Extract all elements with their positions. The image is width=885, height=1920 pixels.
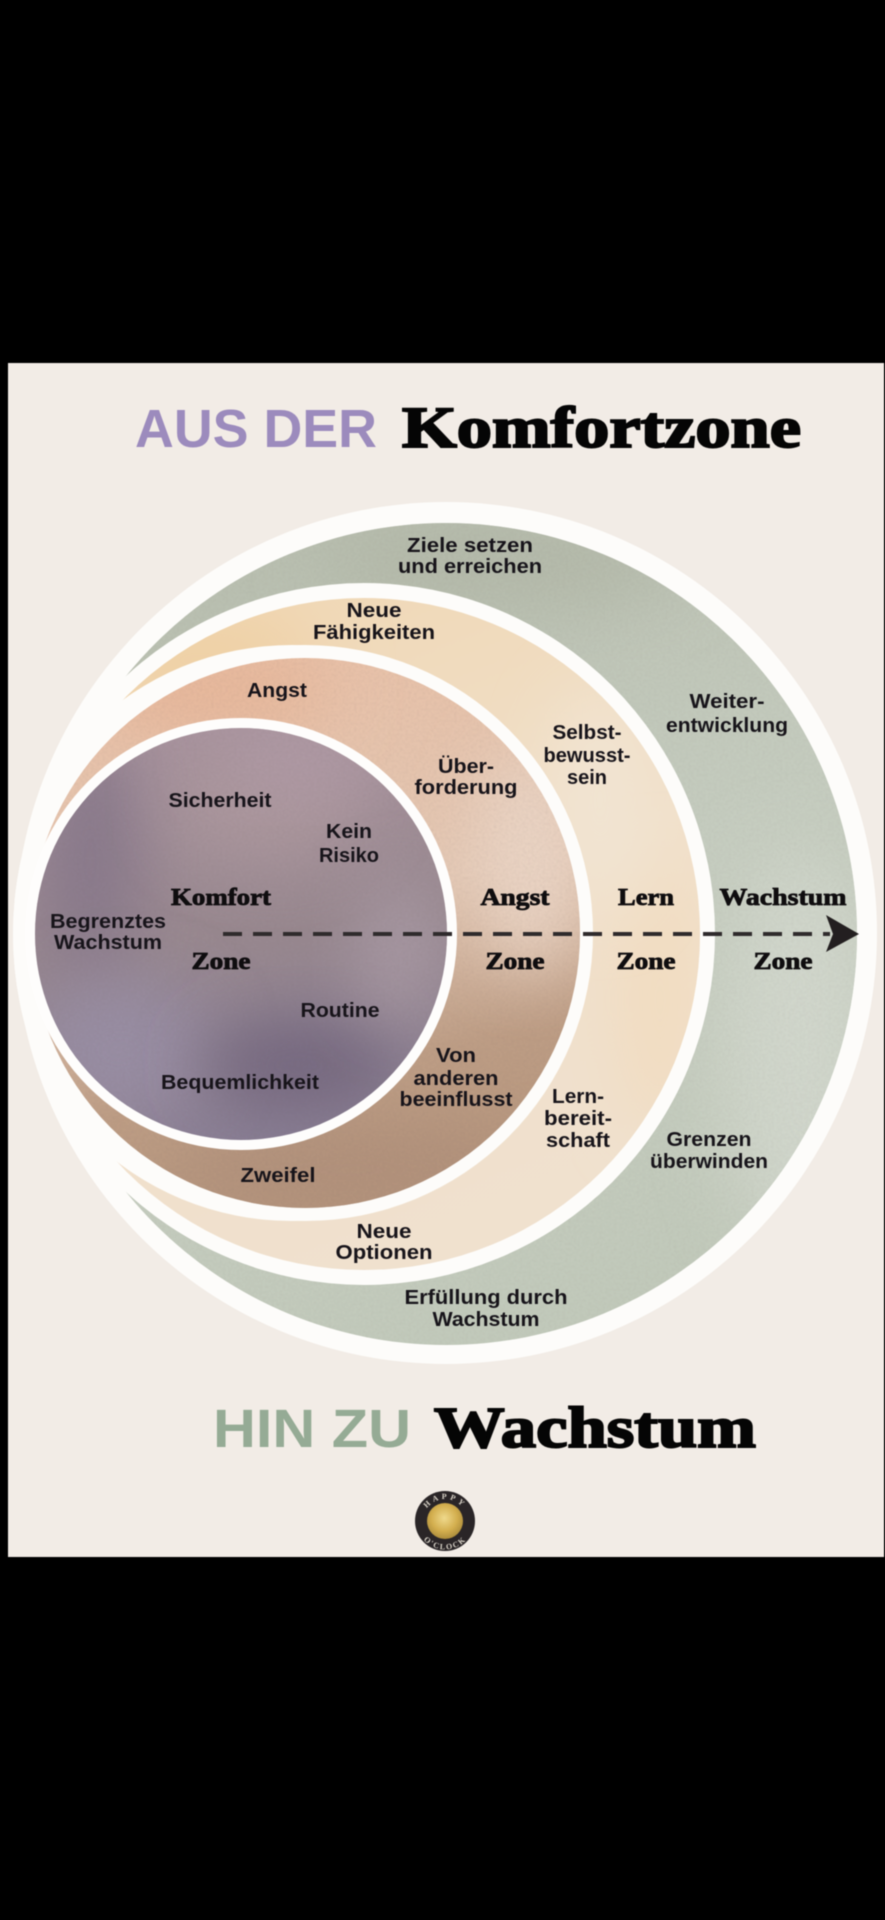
diagram: nested zones xyxy=(4,502,880,1364)
label: Ziele setzen und erreichen xyxy=(398,535,542,578)
zone: Komfort circle xyxy=(25,718,457,1150)
label: Ziele setzen und erreichen: und erreichen xyxy=(398,556,542,578)
label: Selbstbewusstsein: sein xyxy=(567,767,607,789)
zone: Angst ring xyxy=(4,645,593,1221)
label: Bequemlichkeit: Bequemlichkeit xyxy=(161,1072,319,1094)
label: Überforderung: Über- xyxy=(438,755,494,778)
zone names: Lern Zone: Zone xyxy=(616,949,676,975)
zone names: Angst Zone: Angst xyxy=(480,885,550,911)
heading: Hin zu Wachstum xyxy=(213,1395,756,1460)
label: Neue Fähigkeiten: Neue xyxy=(346,600,402,622)
label: Selbstbewusstsein xyxy=(544,722,630,789)
label: Zweifel: Zweifel xyxy=(240,1165,316,1187)
label: Von anderen beeinflusst: anderen xyxy=(414,1068,498,1090)
label: Selbstbewusstsein: bewusst- xyxy=(544,745,630,767)
zone names: Wachstum Zone xyxy=(720,885,846,975)
heading: Hin zu Wachstum: Wachstum xyxy=(434,1395,756,1460)
zone names: Komfort Zone: Komfort xyxy=(171,885,271,911)
label: Neue Optionen: Neue xyxy=(356,1221,412,1243)
logo: Happy O'Clock badge: HAPPY xyxy=(422,1492,466,1508)
label: Begrenztes Wachstum: Begrenztes xyxy=(50,911,166,933)
label: Selbstbewusstsein: Selbst- xyxy=(552,722,622,744)
title: Aus der Komfortzone: AUS DER xyxy=(135,399,377,459)
label: Kein Risiko: Risiko xyxy=(319,845,379,867)
label: Begrenztes Wachstum xyxy=(50,911,166,954)
label: Begrenztes Wachstum: Wachstum xyxy=(54,932,162,954)
label: Überforderung xyxy=(414,755,518,799)
zone names: Komfort Zone: Zone xyxy=(192,949,251,975)
zone names: Lern Zone: Lern xyxy=(618,885,674,911)
label: Neue Optionen: Optionen xyxy=(336,1242,432,1264)
zone names: Angst Zone: Zone xyxy=(486,949,545,975)
label: Lernbereitschaft xyxy=(544,1086,612,1152)
label: Lernbereitschaft: bereit- xyxy=(544,1108,612,1130)
label: Weiterentwicklung xyxy=(666,691,788,737)
label: Angst: Angst xyxy=(247,680,307,702)
label: Neue Fähigkeiten: Fähigkeiten xyxy=(313,622,435,644)
label: Von anderen beeinflusst: beeinflusst xyxy=(400,1089,513,1111)
label: Sicherheit: Sicherheit xyxy=(168,790,272,812)
title: Aus der Komfortzone xyxy=(135,395,801,460)
logo: Happy O'Clock badge xyxy=(414,1490,476,1552)
label: Routine: Routine xyxy=(300,1000,380,1022)
label: Neue Fähigkeiten xyxy=(313,600,435,644)
label: Ziele setzen und erreichen: Ziele setzen xyxy=(407,535,533,557)
label: Überforderung: forderung xyxy=(414,777,518,799)
background panel xyxy=(8,363,884,1557)
title: Aus der Komfortzone: Komfortzone xyxy=(402,395,801,460)
label: Lernbereitschaft: Lern- xyxy=(552,1086,604,1108)
label: Von anderen beeinflusst: Von xyxy=(436,1045,476,1067)
heading: Hin zu Wachstum: HIN ZU xyxy=(213,1399,411,1459)
label: Erfüllung durch Wachstum xyxy=(404,1287,568,1331)
label: Grenzen überwinden xyxy=(650,1129,768,1173)
zone: Lern ring xyxy=(88,582,716,1286)
label: Weiterentwicklung: Weiter- xyxy=(690,691,764,713)
label: Grenzen überwinden: überwinden xyxy=(650,1151,768,1173)
label: Weiterentwicklung: entwicklung xyxy=(666,715,788,737)
zone: Wachstum ring xyxy=(15,502,880,1364)
arrow: dashed growth arrow xyxy=(223,915,859,952)
zone names: Angst Zone xyxy=(480,885,550,975)
zone names: Lern Zone xyxy=(616,885,676,975)
label: Von anderen beeinflusst xyxy=(400,1045,513,1111)
label: Neue Optionen xyxy=(336,1221,432,1264)
zone names: Wachstum Zone: Wachstum xyxy=(720,885,846,911)
label: Grenzen überwinden: Grenzen xyxy=(666,1129,752,1151)
label: Erfüllung durch Wachstum: Erfüllung durch xyxy=(404,1287,568,1309)
zone names: Wachstum Zone: Zone xyxy=(754,949,813,975)
logo: Happy O'Clock badge: O'CLOCK xyxy=(424,1536,466,1550)
label: Erfüllung durch Wachstum: Wachstum xyxy=(432,1309,540,1331)
label: Kein Risiko: Kein xyxy=(326,821,372,843)
zone names: Komfort Zone xyxy=(171,885,271,975)
label: Lernbereitschaft: schaft xyxy=(546,1130,610,1152)
label: Kein Risiko xyxy=(319,821,379,867)
